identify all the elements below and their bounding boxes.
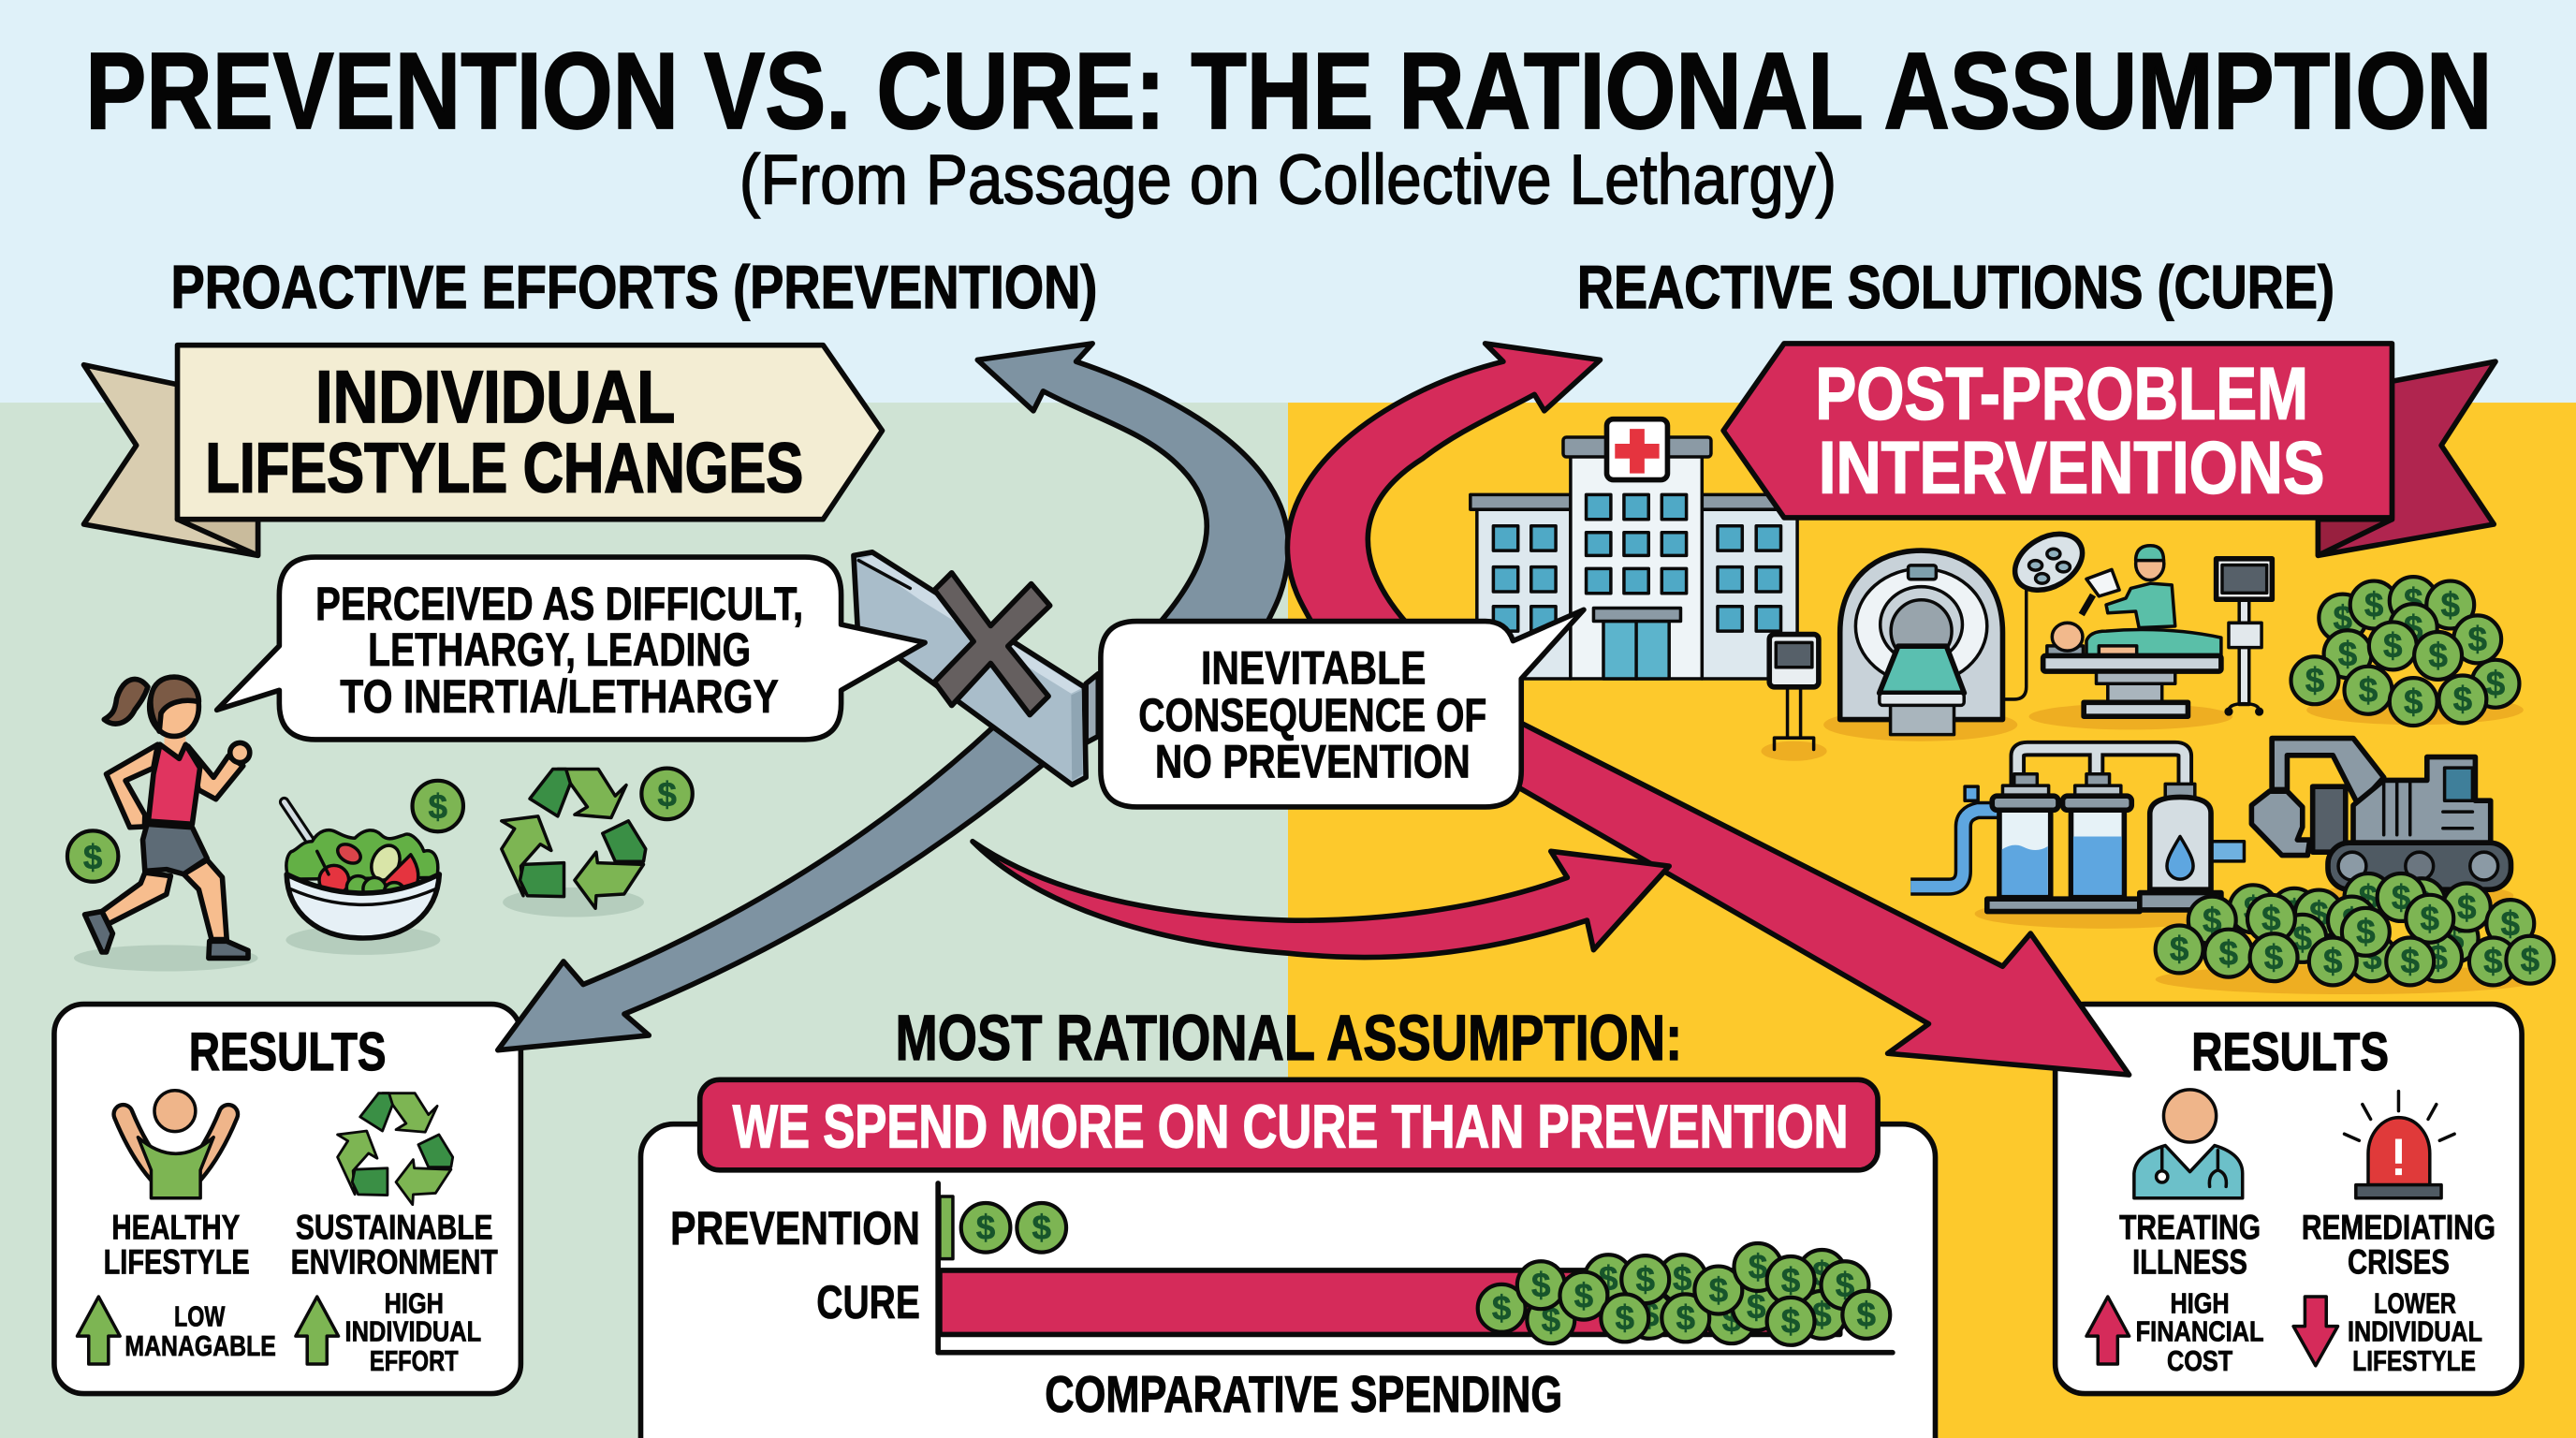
- icon: recycling symbol: [502, 770, 646, 917]
- banner: individual lifestyle changes: INDIVIDUAL: [315, 356, 675, 438]
- callout: perceived as difficult: PERCEIVED AS DIFFICULT,: [315, 578, 803, 630]
- panel: results prevention: [54, 1005, 520, 1394]
- callout: perceived as difficult: [217, 557, 925, 740]
- bar: cure spending: $: [1492, 1289, 1511, 1328]
- bar: prevention spending: [940, 1196, 1066, 1259]
- panel: comparative spending chart: [640, 1124, 1936, 1438]
- bar: cure spending: $: [1781, 1261, 1800, 1299]
- bar: cure spending: $: [1635, 1260, 1655, 1299]
- heading: reactive solutions: REACTIVE SOLUTIONS (CURE): [1577, 253, 2334, 321]
- bar: cure spending: $: [1749, 1248, 1767, 1286]
- illustration: coin pile upper right: $: [2404, 682, 2422, 721]
- panel: results cure: FINANCIAL: [2136, 1314, 2264, 1347]
- bar: cure spending: $: [1616, 1299, 1634, 1337]
- illustration: coin pile lower right: $: [2392, 878, 2410, 917]
- bar: cure spending: $: [1640, 1296, 1659, 1334]
- illustration: coin pile upper right: $: [2359, 671, 2378, 710]
- illustration: coin pile lower right: $: [2293, 919, 2312, 958]
- illustration: coin pile lower right: $: [2356, 913, 2376, 951]
- bar: cure spending: [940, 1243, 1890, 1345]
- illustration: coin pile lower right: $: [2309, 894, 2329, 932]
- icon: up arrow high effort: [296, 1297, 339, 1364]
- icon: blocked X mark: [934, 573, 1050, 715]
- illustration: coin pile lower right: $: [2457, 888, 2477, 926]
- icon: up arrow high cost: [2086, 1297, 2130, 1364]
- illustration: hospital: [1471, 419, 1801, 679]
- panel: results cure: TREATING: [2119, 1209, 2261, 1247]
- bar: cure spending: $: [1747, 1287, 1765, 1326]
- panel: results prevention: HIGH: [385, 1287, 444, 1320]
- illustration: coin pile upper right: $: [2338, 635, 2357, 673]
- banner: we spend more on cure: WE SPEND MORE ON CURE THAN PREVENTION: [733, 1092, 1848, 1160]
- illustration: coin pile lower right: $: [2170, 930, 2188, 968]
- illustration: water treatment plant: [1910, 749, 2244, 929]
- illustration: coin pile upper right: $: [2404, 609, 2422, 647]
- illustration: coin pile lower right: $: [2359, 878, 2378, 917]
- arrow: large grey arrow to prevention results: [498, 726, 1043, 1050]
- illustration: coin pile lower right: [2156, 873, 2554, 994]
- bar: cure spending: $: [1812, 1255, 1832, 1293]
- chart axes: [938, 1183, 1893, 1353]
- icon: blocking wall: [854, 552, 1098, 785]
- panel: results prevention: RESULTS: [189, 1022, 386, 1082]
- arrow: large red arrow to cure results: [1518, 723, 2130, 1075]
- illustration: coin pile lower right: $: [2483, 942, 2503, 980]
- panel: results cure: HIGH: [2170, 1287, 2230, 1320]
- illustration: coin pile lower right: $: [2421, 900, 2439, 938]
- illustration: coin pile lower right: $: [2400, 942, 2420, 980]
- callout: perceived as difficult: LETHARGY, LEADING: [368, 624, 751, 676]
- panel: results prevention: HEALTHY: [111, 1209, 240, 1247]
- banner: individual lifestyle changes: [84, 345, 882, 555]
- panel: results cure: LIFESTYLE: [2352, 1344, 2476, 1377]
- panel: results prevention: LOW: [174, 1300, 225, 1333]
- panel: results prevention: MANAGABLE: [124, 1329, 276, 1362]
- bar: prevention spending: $: [976, 1209, 995, 1247]
- icon: healthy person: [124, 1091, 228, 1198]
- callout: perceived as difficult: TO INERTIA/LETHARGY: [340, 670, 779, 723]
- callout: inevitable consequence: INEVITABLE: [1201, 641, 1426, 694]
- banner: individual lifestyle changes: LIFESTYLE CHANGES: [205, 429, 803, 507]
- illustration: coin pile upper right: $: [2334, 598, 2352, 637]
- bar: cure spending: $: [1812, 1296, 1832, 1334]
- illustration: coin pile lower right: $: [2445, 919, 2464, 958]
- panel: results cure: RESULTS: [2191, 1022, 2389, 1082]
- bar: cure spending: $: [1857, 1296, 1876, 1334]
- icon: coin near runner: [67, 830, 118, 882]
- panel: results cure: INDIVIDUAL: [2348, 1314, 2482, 1347]
- panel: results prevention: INDIVIDUAL: [345, 1314, 481, 1347]
- icon: down arrow lower lifestyle: [2293, 1297, 2338, 1366]
- icon: runner: [74, 677, 258, 971]
- illustration: coin pile upper right: $: [2453, 680, 2472, 718]
- panel: results prevention: EFFORT: [370, 1344, 459, 1377]
- illustration: coin pile lower right: $: [2363, 938, 2382, 976]
- illustration: coin pile lower right: $: [2219, 933, 2238, 972]
- panel: results cure: [2056, 1005, 2522, 1394]
- arrow: red curved arrow up to cure: [1287, 344, 1600, 633]
- illustration: coin pile lower right: $: [2203, 901, 2221, 939]
- panel: results cure: LOWER: [2374, 1287, 2456, 1320]
- illustration: coin pile upper right: $: [2305, 661, 2324, 699]
- icon: coin near recycling: $: [657, 775, 677, 814]
- arrow: small red arrow from prevention to cure: [973, 842, 1669, 958]
- heading: most rational assumption: MOST RATIONAL ASSUMPTION:: [896, 1002, 1682, 1074]
- banner: post-problem interventions: INTERVENTIONS: [1819, 427, 2324, 509]
- chart label: cure: CURE: [816, 1276, 920, 1328]
- illustration: vitals monitor stand: [2217, 559, 2272, 716]
- chart label: prevention: PREVENTION: [670, 1202, 920, 1255]
- bar: cure spending: $: [1599, 1259, 1617, 1298]
- icon: alarm siren: [2345, 1092, 2454, 1198]
- illustration: coin pile lower right: $: [2501, 904, 2520, 943]
- illustration: coin pile upper right: $: [2440, 585, 2460, 624]
- arrow: grey curved arrow up to prevention: [977, 344, 1289, 633]
- heading: proactive efforts: PROACTIVE EFFORTS (PREVENTION): [171, 253, 1097, 321]
- panel: results prevention: SUSTAINABLE: [296, 1209, 493, 1247]
- illustration: coin pile lower right: $: [2285, 893, 2304, 932]
- background: prevention side: [0, 403, 1288, 1438]
- illustration: coin pile upper right: $: [2383, 626, 2403, 665]
- illustration: coin pile upper right: $: [2404, 581, 2422, 620]
- subtitle: (From Passage on Collective Lethargy): [739, 140, 1837, 219]
- icon: coin near runner: $: [83, 838, 102, 876]
- illustration: MRI scanner: [1823, 550, 2017, 741]
- callout: inevitable consequence: CONSEQUENCE OF: [1138, 689, 1486, 741]
- axis title: COMPARATIVE SPENDING: [1045, 1366, 1562, 1423]
- icon: coin near salad: $: [428, 787, 447, 826]
- illustration: excavator: [2251, 739, 2513, 909]
- illustration: patient monitor cart: [1761, 635, 1827, 761]
- illustration: coin pile lower right: $: [2261, 900, 2281, 938]
- illustration: coin pile lower right: $: [2412, 883, 2431, 921]
- icon: coin near salad: [413, 781, 463, 831]
- bar: cure spending: $: [1781, 1302, 1800, 1341]
- illustration: coin pile lower right: $: [2323, 942, 2342, 980]
- panel: results cure: CRISES: [2348, 1242, 2450, 1281]
- icon: up arrow low manageable: [77, 1297, 120, 1364]
- banner: post-problem interventions: [1723, 344, 2496, 555]
- panel: results cure: REMEDIATING: [2302, 1209, 2496, 1247]
- illustration: coin pile lower right: $: [2342, 901, 2362, 939]
- panel: results cure: ILLNESS: [2132, 1242, 2247, 1281]
- banner: we spend more on cure: [700, 1079, 1878, 1170]
- icon: coin near recycling: [641, 769, 693, 819]
- banner: post-problem interventions: POST-PROBLEM: [1815, 353, 2308, 435]
- background: cure side: [1288, 403, 2576, 1438]
- bar: cure spending: $: [1836, 1266, 1854, 1304]
- illustration: coin pile lower right: $: [2264, 938, 2283, 976]
- bar: cure spending: $: [1722, 1300, 1741, 1339]
- panel: results prevention: LIFESTYLE: [104, 1242, 250, 1281]
- bar: cure spending: $: [1709, 1270, 1728, 1309]
- illustration: coin pile lower right: $: [2428, 938, 2448, 976]
- bar: cure spending: $: [1676, 1299, 1695, 1337]
- bar: prevention spending: $: [1032, 1209, 1051, 1247]
- icon: doctor: [2134, 1090, 2243, 1198]
- icon: salad bowl: [285, 802, 440, 955]
- illustration: coin pile lower right: $: [2521, 940, 2539, 978]
- panel: results prevention: ENVIRONMENT: [291, 1242, 498, 1281]
- callout: inevitable consequence: [1101, 609, 1584, 807]
- bar: cure spending: $: [1531, 1266, 1551, 1304]
- bar: cure spending: $: [1542, 1300, 1560, 1339]
- bar: cure spending: $: [1673, 1259, 1691, 1298]
- illustration: coin pile lower right: $: [2244, 889, 2262, 928]
- illustration: coin pile upper right: [2291, 577, 2524, 726]
- icon: recycling result: [338, 1093, 453, 1205]
- panel: results cure: COST: [2167, 1344, 2232, 1377]
- illustration: coin pile upper right: $: [2428, 637, 2448, 675]
- bar: cure spending: $: [1574, 1276, 1593, 1314]
- callout: inevitable consequence: NO PREVENTION: [1155, 735, 1471, 787]
- illustration: operating table and surgeon: [2004, 522, 2232, 729]
- illustration: coin pile upper right: $: [2486, 665, 2505, 703]
- illustration: coin pile upper right: $: [2364, 585, 2383, 624]
- illustration: coin pile upper right: $: [2467, 620, 2487, 658]
